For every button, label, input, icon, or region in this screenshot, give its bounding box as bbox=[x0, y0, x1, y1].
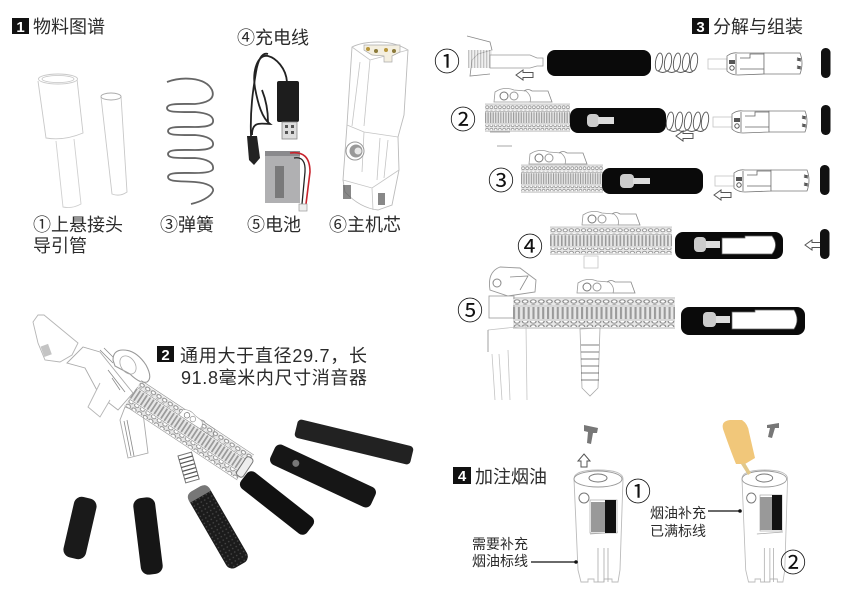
label: spring: ③弹簧 bbox=[160, 215, 214, 235]
step 3 bbox=[488, 150, 830, 200]
step 3: ③ bbox=[488, 166, 514, 196]
step 5: ⑤ bbox=[457, 296, 483, 326]
silencer: longest bbox=[294, 419, 414, 465]
label: upper connector and guide tube: ①上悬接头 bbox=[33, 215, 123, 235]
silencer: knurled bbox=[186, 483, 250, 571]
step 2 bbox=[450, 88, 830, 146]
panel: materials bbox=[12, 17, 408, 256]
icon: battery bbox=[265, 151, 310, 211]
step 1 bbox=[434, 36, 830, 80]
label: full line: 已满标线 bbox=[650, 523, 706, 539]
heading: materials: 物料图谱 bbox=[33, 17, 105, 37]
step 2: ② bbox=[450, 105, 476, 135]
panel: add e-liquid bbox=[453, 420, 806, 582]
heading: disassembly: 3 bbox=[696, 19, 705, 36]
icon: main core bbox=[343, 42, 408, 210]
heading: silencer size bbox=[157, 346, 367, 388]
label: battery: ⑤电池 bbox=[247, 215, 301, 235]
heading: silencer size: 91.8毫米内尺寸消音器 bbox=[181, 368, 367, 388]
step 4 bbox=[517, 211, 830, 268]
icon: guide tube bbox=[101, 93, 127, 195]
heading: silencer size: 通用大于直径29.7，长 bbox=[180, 346, 367, 366]
silencer: medium bbox=[238, 469, 316, 537]
heading: materials: 1 bbox=[16, 19, 25, 36]
step 4: ④ bbox=[517, 232, 543, 262]
step 5 bbox=[457, 267, 805, 400]
heading: silencer size: 2 bbox=[161, 347, 170, 364]
icon: upper connector bbox=[38, 74, 83, 208]
label: charging cable: ④充电线 bbox=[237, 28, 309, 48]
illustration: core with fill line low: ① bbox=[625, 477, 651, 507]
icon: USB charging cable bbox=[247, 54, 299, 165]
label: main core: ⑥主机芯 bbox=[329, 215, 401, 235]
label: full line bbox=[650, 505, 742, 539]
label: refill line: 烟油标线 bbox=[472, 553, 528, 569]
panel: compatible silencers bbox=[33, 315, 414, 576]
illustration: core with bottle: ② bbox=[780, 548, 806, 578]
heading: add e-liquid: 4 bbox=[458, 468, 467, 485]
heading: add e-liquid: 加注烟油 bbox=[475, 467, 547, 487]
panel: disassembly and assembly bbox=[434, 17, 830, 400]
label: upper connector and guide tube bbox=[33, 215, 123, 256]
illustration: core with bottle bbox=[723, 420, 806, 582]
silencer: short left bbox=[62, 495, 98, 561]
label: upper connector and guide tube: 导引管 bbox=[33, 236, 87, 256]
illustration: rifle bbox=[33, 315, 256, 483]
label: refill line: 需要补充 bbox=[472, 536, 528, 552]
label: refill line bbox=[472, 536, 578, 569]
silencer: long with logo bbox=[268, 443, 378, 509]
illustration: core with fill line low bbox=[574, 425, 651, 582]
heading: disassembly: 分解与组装 bbox=[713, 17, 803, 37]
silencer: short middle bbox=[132, 496, 164, 576]
icon: spring bbox=[167, 79, 213, 204]
step 1: ① bbox=[434, 47, 460, 77]
label: full line: 烟油补充 bbox=[650, 505, 706, 521]
